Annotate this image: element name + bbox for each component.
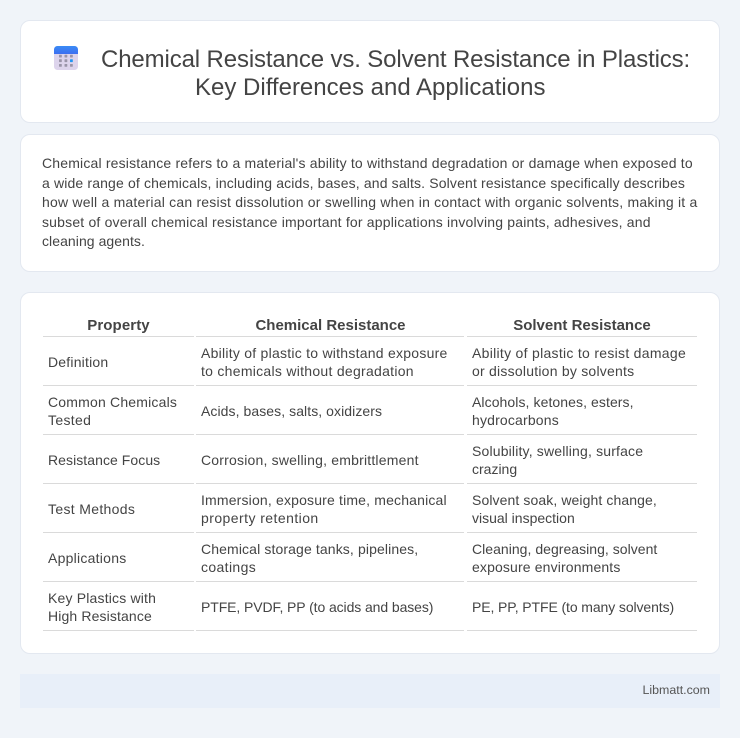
intro paragraph: a wide range of chemicals, including acids, bases, and salts. Solvent resistance specifically describes	[42, 174, 685, 190]
row: definition: to chemicals without degradation	[201, 363, 414, 379]
row: common chemicals tested: Acids, bases, salts, oxidizers	[201, 403, 382, 419]
row: test methods: Immersion, exposure time, mechanical	[201, 492, 447, 508]
intro paragraph: how well a material can resist dissolution or swelling when in contact with organic solvents, making it a	[42, 194, 697, 210]
intro paragraph: subset of overall chemical resistance important for applications involving paints, adhesives, and	[42, 214, 651, 230]
intro text panel	[20, 134, 720, 272]
footer bar	[20, 674, 720, 708]
row: common chemicals tested: Common Chemicals	[48, 394, 177, 410]
row: definition: or dissolution by solvents	[472, 363, 634, 379]
footer credit: Libmatt.com	[643, 683, 710, 697]
row: key plastics	[48, 590, 674, 624]
row: applications: Cleaning, degreasing, solvent	[472, 541, 657, 557]
row: applications: Chemical storage tanks, pipelines,	[201, 541, 418, 557]
row: definition: Definition	[48, 354, 108, 370]
table header: Chemical Resistance	[255, 317, 406, 334]
table header: Solvent Resistance	[513, 317, 651, 334]
row: key plastics: Key Plastics with	[48, 590, 156, 606]
row: common chemicals tested: Tested	[48, 412, 91, 428]
title: Key Differences and Applications	[195, 74, 545, 100]
comparison table panel	[20, 292, 720, 654]
title	[101, 46, 690, 100]
row: resistance focus: Resistance Focus	[48, 452, 160, 468]
comparison table	[43, 317, 697, 631]
row: common chemicals tested: hydrocarbons	[472, 412, 559, 428]
row: test methods: property retention	[201, 510, 319, 526]
row: applications	[48, 541, 658, 575]
intro paragraph: cleaning agents.	[42, 233, 145, 249]
table header	[87, 317, 651, 334]
table header: Property	[87, 317, 150, 334]
icon: calendar	[54, 46, 78, 70]
row: definition: Ability of plastic to resist damage	[472, 345, 686, 361]
row: resistance focus: Corrosion, swelling, embrittlement	[201, 452, 419, 468]
intro paragraph	[42, 155, 698, 249]
row: key plastics: PE, PP, PTFE (to many solvents)	[472, 599, 674, 615]
row: test methods: Test Methods	[48, 501, 135, 517]
row: test methods: Solvent soak, weight change,	[472, 492, 657, 508]
row: common chemicals tested: Alcohols, ketones, esters,	[472, 394, 634, 410]
row: resistance focus	[48, 443, 643, 477]
header panel	[20, 20, 720, 123]
row: definition: Ability of plastic to withstand exposure	[201, 345, 448, 361]
row: key plastics: PTFE, PVDF, PP (to acids and bases)	[201, 599, 433, 615]
row: test methods	[48, 492, 657, 526]
row: resistance focus: Solubility, swelling, surface	[472, 443, 643, 459]
title: Chemical Resistance vs. Solvent Resistance in Plastics:	[101, 46, 690, 72]
row: applications: Applications	[48, 550, 126, 566]
row: resistance focus: crazing	[472, 461, 517, 477]
intro paragraph: Chemical resistance refers to a material's ability to withstand degradation or damage when exposed to	[42, 155, 693, 171]
row: definition	[48, 345, 686, 379]
row: applications: coatings	[201, 559, 256, 575]
row: applications: exposure environments	[472, 559, 620, 575]
row: common chemicals tested	[48, 394, 634, 428]
row: key plastics: High Resistance	[48, 608, 152, 624]
row: test methods: visual inspection	[472, 510, 575, 526]
